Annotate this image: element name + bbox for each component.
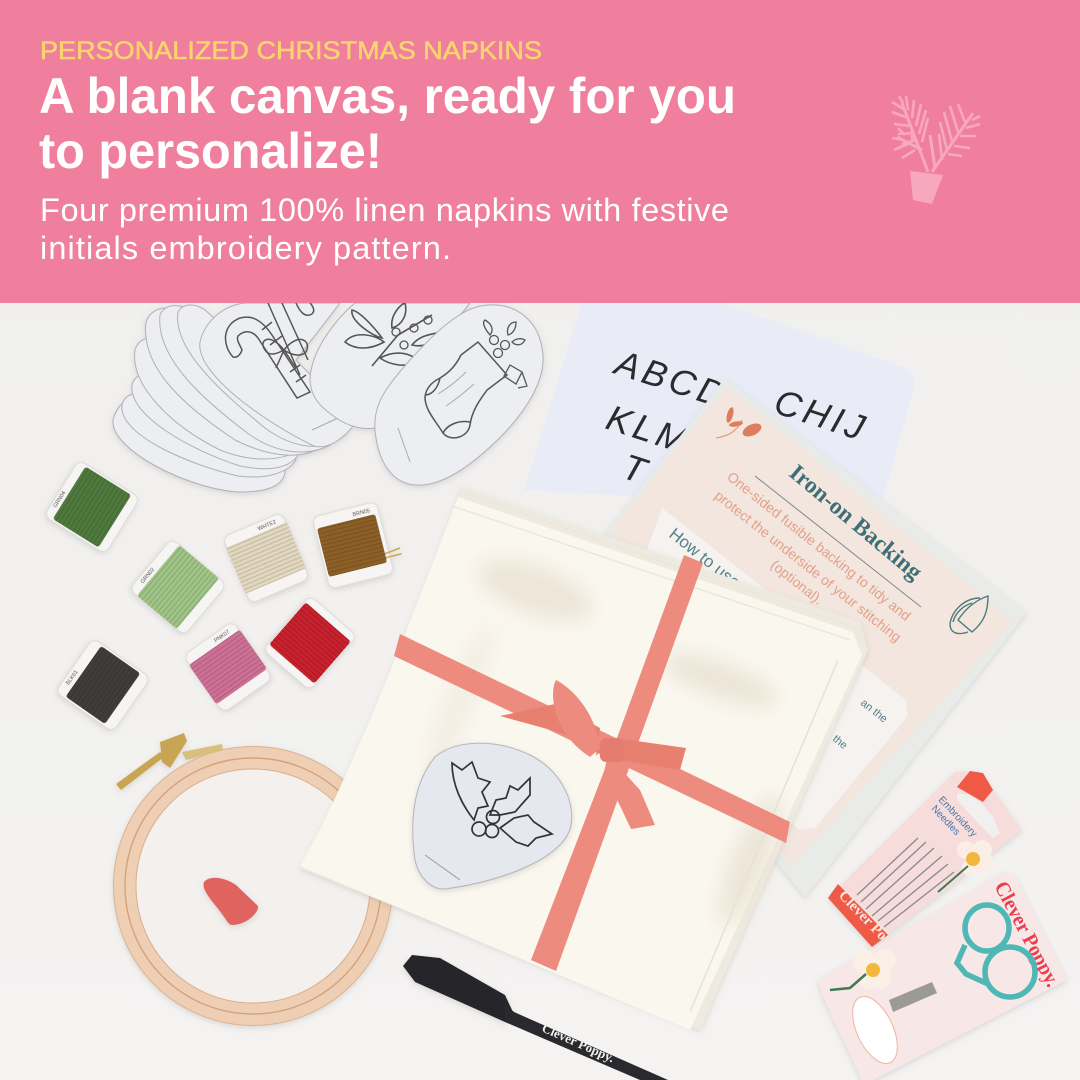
alphabet pattern sheet bbox=[524, 303, 916, 510]
icon: leaf sprig bbox=[716, 406, 763, 439]
thread bobbin: pink bbox=[183, 621, 273, 713]
alphabet pattern sheet: CHIJ bbox=[770, 381, 873, 449]
thread bobbin: dark green bbox=[44, 460, 140, 554]
pack flower bbox=[830, 949, 896, 990]
iron-on backing card bbox=[600, 378, 1027, 897]
card title: Iron-on Backing bbox=[784, 460, 927, 586]
card description: (optional). bbox=[768, 556, 826, 608]
thread bobbin: black: BLK01 bbox=[65, 669, 80, 686]
needle pack flower bbox=[938, 840, 993, 892]
stocking card bbox=[375, 305, 543, 485]
subheading: initials embroidery pattern. bbox=[40, 230, 451, 266]
embroidery needles pack bbox=[828, 771, 1022, 950]
card rule bbox=[755, 476, 921, 607]
thread bobbin: light green: GRN02 bbox=[140, 567, 156, 585]
thread bobbin: red bbox=[263, 595, 357, 691]
thread bobbin: brown bbox=[312, 498, 406, 589]
scissors pack bbox=[818, 873, 1067, 1080]
subheading bbox=[40, 192, 729, 266]
icon: potted plant bbox=[892, 96, 980, 204]
thread bobbin: cream bbox=[222, 512, 310, 604]
alphabet pattern sheet: T bbox=[618, 446, 654, 492]
subheading: Four premium 100% linen napkins with festive bbox=[40, 192, 729, 228]
scissors bbox=[889, 905, 1035, 1012]
how-to text bbox=[666, 524, 890, 752]
how-to text: an the bbox=[858, 697, 890, 725]
embroidery needles pack: Clever Pop bbox=[835, 888, 896, 950]
pink ribbon and bow bbox=[394, 555, 790, 971]
card pile with patterns bbox=[113, 303, 543, 492]
alphabet pattern sheet: KLM bbox=[602, 397, 696, 462]
main heading bbox=[39, 68, 736, 179]
mistletoe card bbox=[310, 303, 470, 428]
alphabet pattern sheet: ABCD bbox=[609, 341, 734, 416]
needles bbox=[857, 838, 954, 927]
card description: protect the underside of your stitching bbox=[712, 487, 904, 645]
icon: iron bbox=[950, 596, 988, 634]
how-to text: How to use bbox=[666, 524, 744, 592]
needle pack text: Embroidery bbox=[936, 795, 979, 839]
header band bbox=[0, 0, 1080, 303]
embroidery hoop bbox=[114, 733, 392, 1026]
thread bobbin: black bbox=[55, 638, 151, 732]
marker pen: Clever Poppy. bbox=[540, 1020, 617, 1065]
thread bobbin: pink: PNK07 bbox=[213, 629, 231, 644]
thread bobbin: brown: BRN05 bbox=[352, 508, 371, 518]
main heading: A blank canvas, ready for you bbox=[39, 68, 736, 124]
main heading: to personalize! bbox=[39, 123, 382, 179]
napkin shading bbox=[417, 547, 793, 932]
thread bobbin: light green bbox=[129, 539, 227, 635]
thimble bbox=[204, 878, 258, 925]
how-to text: the bbox=[830, 733, 850, 752]
brand name: Clever Poppy. bbox=[990, 877, 1065, 991]
eyebrow heading: PERSONALIZED CHRISTMAS NAPKINS bbox=[40, 37, 542, 65]
holly pattern card bbox=[413, 743, 572, 889]
thread bobbin: dark green: GRN04 bbox=[53, 490, 67, 509]
speech bubble bbox=[843, 990, 907, 1070]
hoop clasp bbox=[116, 733, 223, 790]
linen napkins bbox=[300, 487, 868, 1030]
card description: One-sided fusible backing to tidy and bbox=[724, 468, 914, 624]
needle pack text: Needles bbox=[929, 804, 962, 838]
marker pen bbox=[403, 955, 668, 1080]
thread bobbin: cream: WHTE2 bbox=[257, 519, 277, 533]
candy cane card bbox=[200, 303, 356, 447]
how-to box bbox=[600, 508, 908, 830]
